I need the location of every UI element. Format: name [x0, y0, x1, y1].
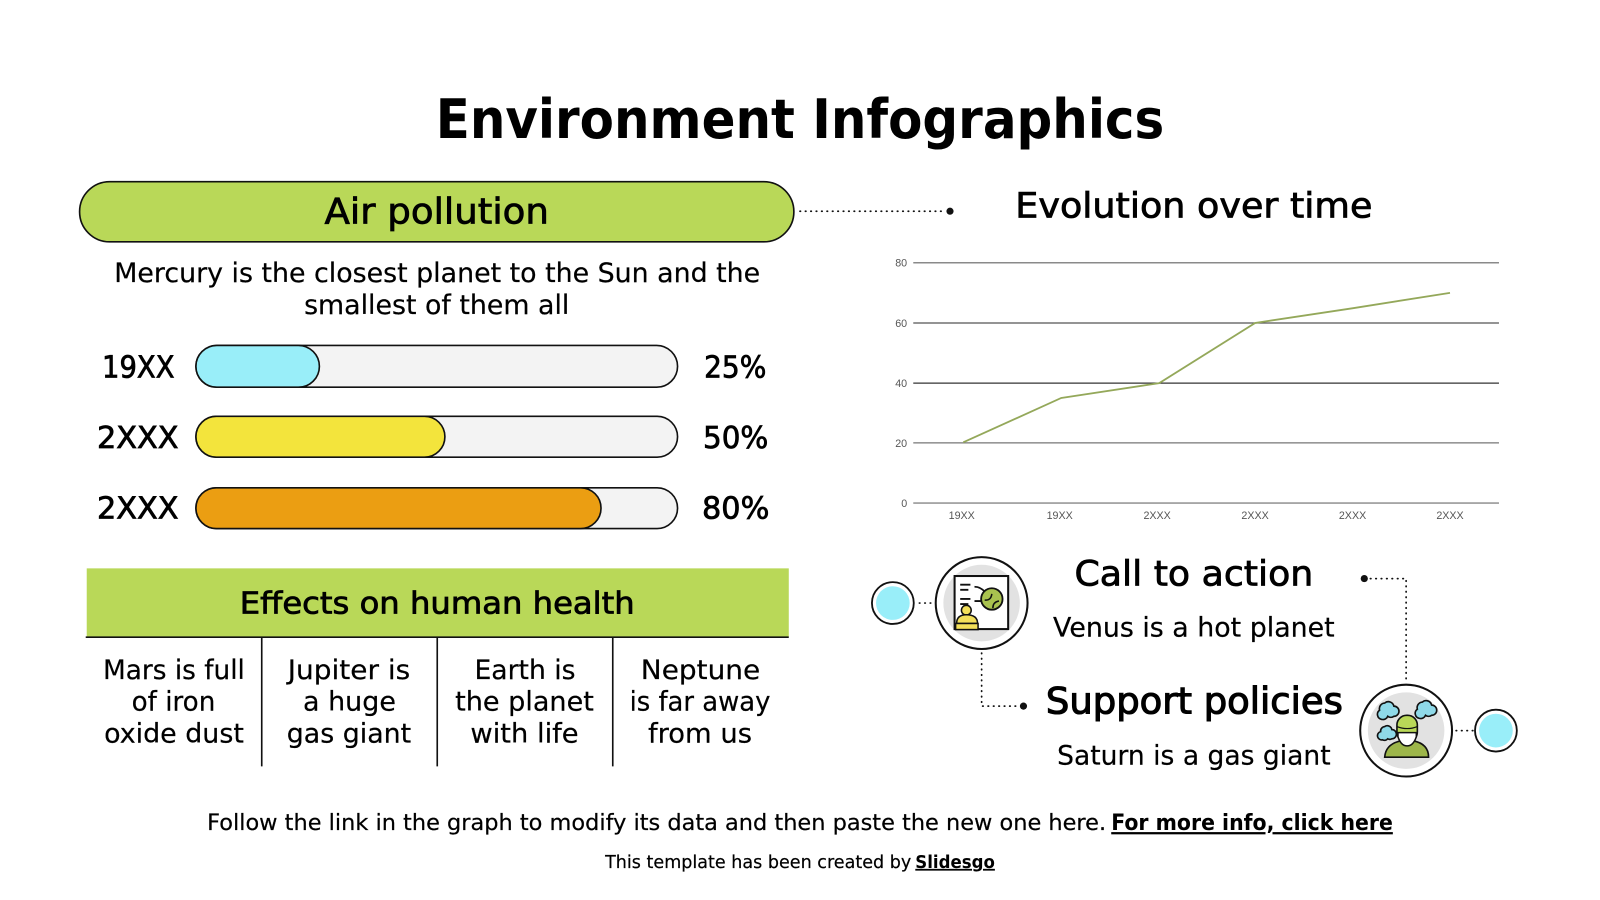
description: smallest of them all: [304, 290, 569, 321]
connector: presenter icon to support policies: [982, 653, 1027, 710]
footer note: Follow the link in the graph to modify its data and then paste the new one here.: [207, 810, 1106, 836]
cell: Jupiter: gas giant: [287, 718, 411, 749]
footer note: For more info, click here: [1111, 810, 1393, 836]
cell: Earth: [455, 655, 594, 749]
line chart: 2XXX: [1436, 510, 1464, 522]
line chart: 19XX: [949, 510, 975, 522]
table header: [87, 568, 789, 637]
cell: Mars: oxide dust: [104, 718, 244, 749]
cell: Earth: Earth is: [474, 655, 576, 686]
cell: Neptune: [630, 655, 770, 749]
cell: Mars: of iron: [132, 687, 215, 718]
support policies: Support policies: [1046, 679, 1343, 722]
line chart: 80: [895, 257, 907, 269]
credit line: This template has been created by: [604, 852, 912, 873]
progress bar: 19XX 25%: [102, 345, 766, 387]
progress bar: 2XXX 80%: [97, 488, 769, 529]
progress bar: 2XXX 50%: [97, 416, 768, 457]
line chart: 2XXX: [1339, 510, 1366, 522]
line chart: 0: [901, 498, 907, 510]
call to action: Venus is a hot planet: [1053, 613, 1335, 644]
support policies: Saturn is a gas giant: [1057, 740, 1331, 771]
marker: cyan circle right: [1456, 710, 1517, 752]
cell: Earth: with life: [470, 718, 579, 749]
progress bar: 2XXX 50%: 50%: [703, 421, 768, 456]
connector: call to action to support icon: [1361, 575, 1406, 683]
line chart: 2XXX: [1143, 510, 1171, 522]
support policies: [1046, 679, 1343, 771]
connector: air pollution to chart heading: [800, 208, 954, 215]
cell: Mars: Mars is full: [103, 655, 245, 686]
panel: effects on human health: [86, 568, 789, 766]
marker: cyan circle left: [872, 582, 934, 624]
progress bar: 19XX 25%: 25%: [704, 351, 766, 386]
line chart: 19XX: [1047, 510, 1073, 522]
cell: Neptune: is far away: [630, 687, 770, 718]
description: Mercury is the closest planet to the Sun and the: [114, 258, 760, 289]
line chart: 40: [895, 378, 907, 390]
progress bar: 2XXX 80%: 80%: [702, 491, 769, 526]
heading: evolution over time: Evolution over time: [1015, 186, 1372, 226]
panel: air pollution: [80, 182, 794, 529]
call to action: Call to action: [1074, 555, 1313, 595]
air pollution pill heading: [80, 182, 794, 242]
line chart: [895, 257, 1499, 522]
progress bar: 2XXX 80%: 2XXX: [97, 491, 179, 526]
line chart: 20: [895, 438, 907, 450]
description: [114, 258, 760, 321]
cell: Earth: the planet: [455, 687, 594, 718]
cell: Jupiter: a huge: [303, 687, 396, 718]
title: Environment Infographics: [436, 88, 1164, 151]
cell: Jupiter: Jupiter is: [286, 655, 410, 686]
call to action: [1053, 555, 1335, 644]
credit line: Slidesgo: [915, 852, 995, 873]
cell: Neptune: Neptune: [641, 655, 760, 686]
icon: person with mask and pollution clouds: [1360, 685, 1452, 777]
air pollution pill heading: Air pollution: [324, 191, 549, 232]
line chart: 2XXX: [1241, 510, 1269, 522]
cell: Neptune: from us: [648, 718, 752, 749]
table header: Effects on human health: [240, 586, 635, 621]
line chart: 60: [895, 318, 907, 330]
progress bar: 19XX 25%: 19XX: [102, 351, 175, 386]
icon: presenter with globe: [936, 557, 1028, 649]
cell: Mars: [103, 655, 245, 749]
cell: Jupiter: [286, 655, 411, 749]
progress bar: 2XXX 50%: 2XXX: [97, 421, 179, 456]
